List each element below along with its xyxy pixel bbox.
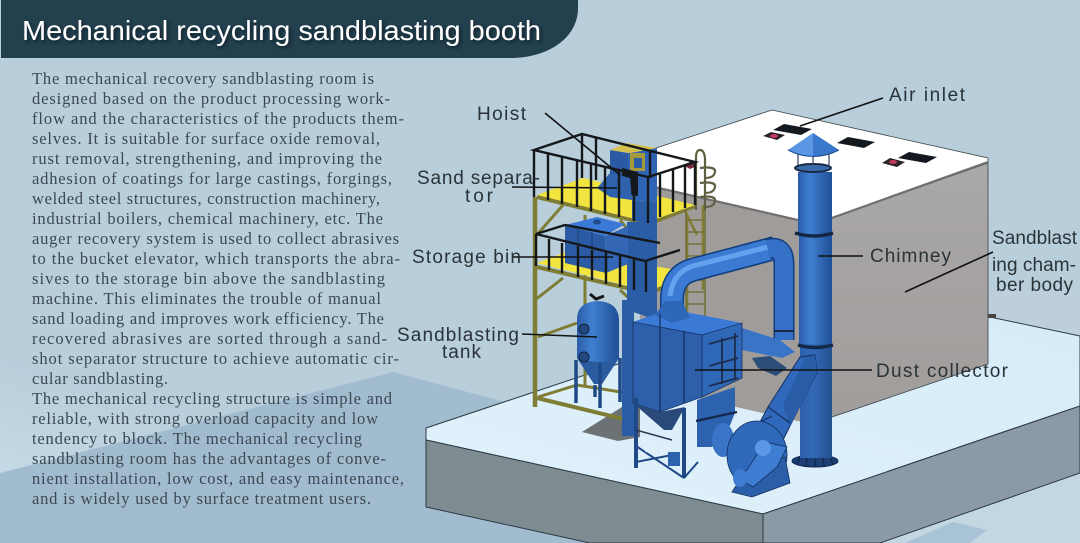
duct from fan to chimney	[760, 355, 817, 440]
hoist column	[610, 143, 657, 436]
description text block: flow and the characteristics of the products them-	[32, 109, 404, 128]
label: dust collector: Dust collector	[876, 361, 1009, 382]
label: sand separator: Sand separa-	[417, 168, 540, 189]
description text block: and is widely used by surface treatment users.	[32, 489, 371, 508]
label: air inlet: Air inlet	[889, 85, 966, 106]
description text block: sand loading and improves work efficiency. The	[32, 309, 384, 328]
description text block: reliable, with strong overload capacity and low	[32, 409, 378, 428]
label: sandblasting chamber body: ing cham-	[992, 255, 1076, 276]
description text block: adhesion of coatings for large castings, forgings,	[32, 169, 392, 188]
description text block: welded steel structures, construction machinery,	[32, 189, 380, 208]
description text block: The mechanical recovery sandblasting room is	[32, 69, 374, 88]
sand separator	[597, 173, 632, 200]
callout labels	[397, 85, 1078, 382]
title banner	[1, 0, 578, 58]
description text block: industrial boilers, chemical machinery, etc. The	[32, 209, 383, 228]
description text block: cular sandblasting.	[32, 369, 168, 388]
description text block: machine. This eliminates the trouble of manual	[32, 289, 381, 308]
lower platform deck	[537, 252, 678, 291]
label: sand separator: tor	[465, 186, 494, 207]
description text block	[32, 69, 404, 508]
description text block: nient installation, low cost, and easy maintenance,	[32, 469, 404, 488]
description text block: recovered abrasives are sorted through a sand-	[32, 329, 387, 348]
description text block: designed based on the product processing work-	[32, 89, 390, 108]
blue ducting pipe	[670, 246, 795, 376]
concrete slab	[426, 317, 1080, 543]
dust collector	[633, 301, 742, 478]
label: sandblasting chamber body	[905, 228, 1078, 296]
title: Mechanical recycling sandblasting booth	[22, 15, 541, 46]
label: hoist: Hoist	[477, 104, 527, 125]
label: hoist	[477, 104, 620, 175]
railings	[534, 134, 695, 292]
description text block: sandblasting room has the advantages of conve-	[32, 449, 386, 468]
storage bin	[565, 217, 628, 273]
label: sandblasting chamber body: ber body	[996, 275, 1074, 296]
description text block: shot separator structure to achieve automatic cir-	[32, 349, 399, 368]
description text block: auger recovery system is used to collect abrasives	[32, 229, 399, 248]
chimney	[788, 133, 839, 467]
label: air inlet	[800, 85, 966, 126]
steel frame tower	[535, 197, 703, 422]
label: sandblasting tank: Sandblasting	[397, 325, 519, 346]
ladder	[686, 150, 715, 320]
description text block: to the bucket elevator, which transports the abra-	[32, 249, 400, 268]
sandblasting tank	[576, 294, 620, 408]
description text block: selves. It is suitable for surface oxide removal,	[32, 129, 380, 148]
label: chimney: Chimney	[870, 246, 952, 267]
sandblasting chamber body	[640, 110, 996, 425]
label: sand separator	[417, 168, 617, 207]
roof air inlets	[683, 124, 937, 169]
label: sandblasting chamber body: Sandblast	[992, 228, 1078, 249]
description text block: The mechanical recycling structure is simple and	[32, 389, 393, 408]
description text block: tendency to block. The mechanical recycling	[32, 429, 362, 448]
label: sandblasting tank: tank	[442, 342, 482, 363]
label: sandblasting tank	[397, 325, 597, 363]
upper platform deck	[537, 178, 695, 222]
centrifugal fan	[712, 421, 790, 497]
description text block: rust removal, strengthening, and improving the	[32, 149, 382, 168]
label: chimney	[818, 246, 952, 267]
label: storage bin: Storage bin	[412, 247, 521, 268]
description text block: sives to the storage bin above the sandblasting	[32, 269, 385, 288]
floor pit shadow	[582, 402, 640, 441]
